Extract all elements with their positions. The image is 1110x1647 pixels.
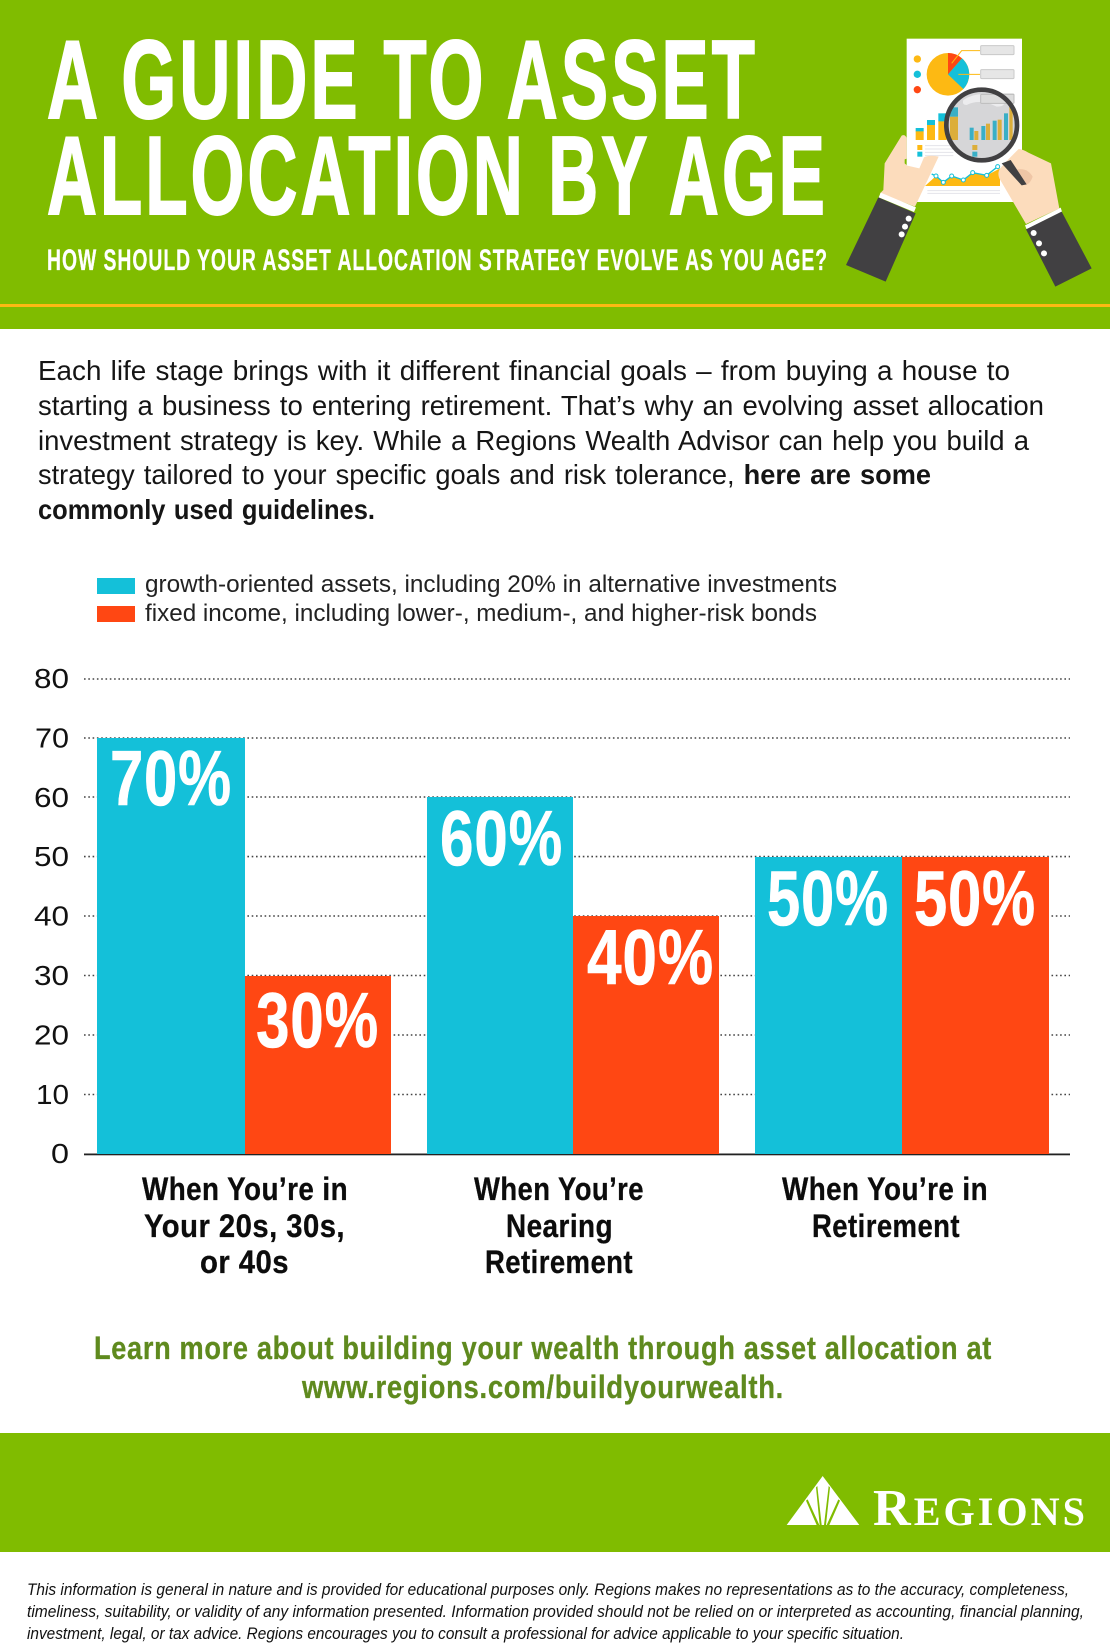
- chart axis labels: 0: [51, 1138, 69, 1169]
- chart axis labels: 50: [34, 841, 69, 872]
- chart axis labels: 20: [34, 1019, 69, 1050]
- chart axis labels: 80: [34, 663, 69, 694]
- category label: nearing retirement: [474, 1171, 644, 1280]
- chart axis labels: [34, 663, 69, 1169]
- call to action: [94, 1330, 992, 1405]
- category label: twenties to forties: or 40s: [200, 1244, 289, 1280]
- bar: 50% fixed income: 50%: [914, 854, 1036, 942]
- text block: introduction: [38, 355, 1044, 525]
- logo: Regions: [787, 1476, 1088, 1537]
- call to action: www.regions.com/buildyourwealth.: [301, 1369, 784, 1405]
- bar: 30% fixed income: [245, 976, 391, 1154]
- text block: introduction: Each life stage brings with it different financial goals – from buying a house to: [38, 355, 1010, 386]
- icon: hands holding report with magnifying glass: [846, 39, 1092, 287]
- bar: 70% growth: [97, 734, 245, 1154]
- bar: 40% fixed income: 40%: [587, 913, 714, 1001]
- text block: introduction: investment strategy is key. While a Regions Wealth Advisor can help you build a: [38, 425, 1030, 456]
- chart axis labels: 10: [36, 1079, 69, 1110]
- disclaimer: [27, 1581, 1084, 1643]
- category label: in retirement: When You’re in: [782, 1171, 988, 1207]
- panel: header banner: [0, 0, 1110, 329]
- logo: Regions: REGIONS: [873, 1480, 1088, 1537]
- bar: 50% growth: [755, 854, 902, 1154]
- chart axis labels: 40: [34, 901, 69, 932]
- text block: introduction: starting a business to entering retirement. That’s why an evolving asset allocation: [38, 390, 1044, 421]
- category label: nearing retirement: Retirement: [485, 1244, 633, 1280]
- legend: [97, 571, 837, 627]
- bar: 70% growth: 70%: [110, 734, 232, 822]
- legend: growth-oriented assets, including 20% in alternative investments: [145, 571, 837, 598]
- category label: twenties to forties: [142, 1171, 348, 1280]
- bar: 30% fixed income: 30%: [256, 976, 379, 1064]
- category label: twenties to forties: Your 20s, 30s,: [144, 1208, 345, 1244]
- bar: 50% fixed income: [902, 854, 1049, 1154]
- title: [47, 18, 828, 238]
- category label: twenties to forties: When You’re in: [142, 1171, 348, 1207]
- bar chart: [34, 663, 1070, 1280]
- bar: 40% fixed income: [573, 913, 719, 1154]
- category label: in retirement: [782, 1171, 988, 1244]
- text block: introduction: commonly used guidelines.: [38, 494, 375, 525]
- legend: fixed income, including lower-, medium-, and higher-risk bonds: [145, 600, 817, 627]
- chart axis labels: 70: [35, 722, 69, 753]
- category label: in retirement: Retirement: [812, 1208, 960, 1244]
- category label: nearing retirement: When You’re: [474, 1171, 644, 1207]
- panel: footer banner: [0, 1433, 1110, 1552]
- disclaimer: investment, legal, or tax advice. Regions encourages you to consult a professional for advice applicable to your specific situation.: [27, 1625, 904, 1643]
- text block: introduction: strategy tailored to your specific goals and risk tolerance, here are some: [38, 459, 931, 490]
- bar: 60% growth: [427, 794, 573, 1154]
- chart axis labels: 60: [34, 782, 69, 813]
- bar: 60% growth: 60%: [440, 794, 563, 882]
- chart axis labels: 30: [34, 960, 69, 991]
- category label: nearing retirement: Nearing: [506, 1208, 613, 1244]
- bar: 50% growth: 50%: [767, 854, 889, 942]
- disclaimer: This information is general in nature and is provided for educational purposes only. Regions makes no representations as to the accuracy, completeness,: [27, 1581, 1069, 1599]
